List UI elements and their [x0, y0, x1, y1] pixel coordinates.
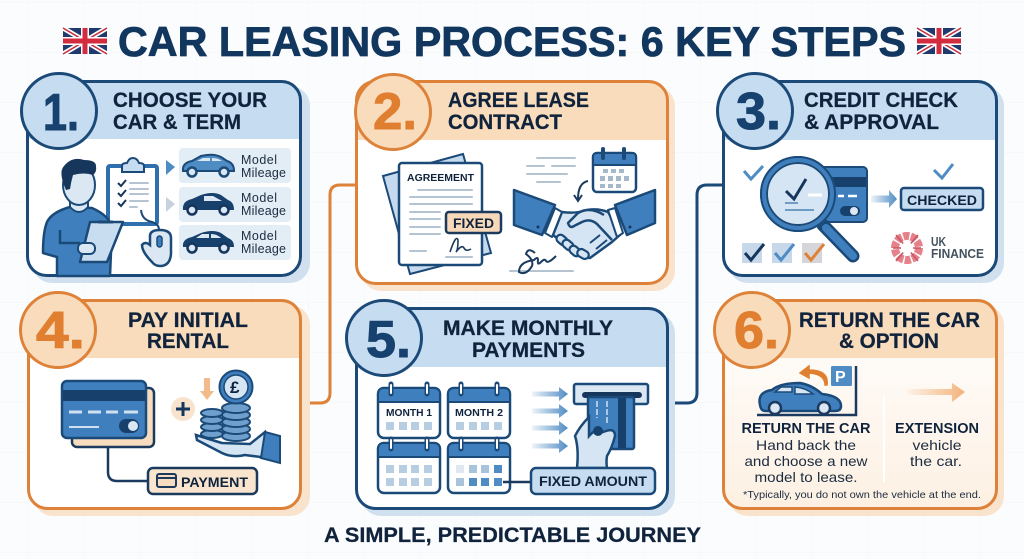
icon: held tablet [78, 222, 123, 262]
icon: agreement document [383, 154, 491, 274]
icon: person [43, 159, 112, 276]
icon: down arrow [200, 378, 214, 400]
number badge 6: 6. [734, 302, 779, 360]
heading [128, 309, 248, 353]
calendar: month 1: MONTH 1 [386, 408, 432, 419]
heading: & APPROVAL [804, 111, 939, 134]
heading: PAYMENTS [472, 339, 585, 362]
text: return the car [742, 421, 871, 485]
heading: MAKE MONTHLY [443, 317, 613, 340]
heading [113, 89, 267, 134]
heading: AGREE LEASE [448, 89, 589, 112]
badge: payment [148, 468, 257, 494]
icon: arrows [166, 160, 175, 212]
heading: CAR & TERM [113, 111, 241, 134]
badge: checked: CHECKED [907, 192, 977, 208]
logo: UK Finance: FINANCE [931, 247, 984, 261]
heading: CONTRACT [448, 111, 562, 134]
heading [804, 89, 958, 134]
badge: fixed: FIXED [453, 215, 494, 231]
panel: step 5 make monthly payments [346, 300, 675, 516]
icon: plus [171, 397, 195, 421]
logo: UK Finance [893, 235, 984, 261]
car option row 1: Model [241, 153, 277, 167]
text: return the car: RETURN THE CAR [742, 421, 871, 437]
car option row 2 [179, 187, 291, 222]
calendar: month 2 [448, 384, 510, 438]
text: return the car: and choose a new [744, 453, 868, 469]
icon: curved arrow [574, 181, 588, 201]
number badge 4 [20, 292, 96, 368]
badge: fixed amount [531, 468, 655, 494]
car option row 3: Model [241, 229, 277, 243]
number badge 1: 1. [43, 84, 79, 142]
icon: coins in hand: £ [230, 378, 240, 397]
text: return the car: model to lease. [754, 469, 858, 485]
calendar: month 1 [378, 384, 440, 438]
icon: return arrow [800, 366, 827, 385]
icon: clipboard [108, 158, 157, 224]
icon: handshake [514, 190, 655, 260]
panel: step 3 credit check and approval [718, 74, 1004, 283]
number badge 2 [356, 74, 430, 150]
heading [443, 317, 613, 362]
icon: checkboxes [742, 243, 824, 263]
heading: PAY INITIAL [128, 309, 248, 332]
heading [448, 89, 589, 134]
car option row 2: Model [241, 191, 277, 205]
badge: payment: PAYMENT [181, 474, 248, 490]
number badge 2: 2. [373, 83, 417, 141]
icon: signature [510, 250, 573, 273]
number badge 5: 5. [366, 311, 411, 369]
heading: & OPTION [839, 330, 939, 353]
text: extension [895, 421, 979, 469]
icon: car [760, 383, 841, 414]
icon: extension arrow [908, 383, 965, 402]
icon: arrow to checked [871, 190, 897, 208]
icon: credit cards [62, 381, 154, 447]
calendar: month 2: MONTH 2 [455, 408, 503, 419]
heading: RENTAL [147, 330, 229, 353]
number badge 3: 3. [736, 83, 781, 141]
text: return the car: Hand back the [756, 437, 856, 453]
car option row 2: Mileage [241, 204, 286, 218]
flag: right Union Jack [917, 28, 961, 54]
car option row 3: Mileage [241, 242, 286, 256]
icon: coins in hand [196, 370, 280, 463]
icon: text lines [527, 158, 575, 182]
icon: card machine and hand [574, 384, 648, 468]
icon: payment arrows [532, 387, 568, 453]
tagline: A SIMPLE, PREDICTABLE JOURNEY [324, 524, 701, 547]
badge: fixed amount: FIXED AMOUNT [539, 473, 647, 489]
heading: CHOOSE YOUR [113, 89, 267, 112]
icon: parking sign and bay: P [835, 369, 846, 386]
number badge 4: 4. [36, 302, 85, 360]
badge: checked [901, 188, 983, 210]
icon: agreement document: AGREEMENT [407, 172, 475, 184]
number badge 1 [22, 74, 96, 148]
heading [799, 309, 980, 353]
divider [883, 395, 885, 482]
calendar: month 3 [378, 439, 440, 493]
car option row 1 [179, 148, 291, 183]
number badge 6 [714, 292, 790, 368]
number badge 5 [346, 300, 422, 376]
panel: step 6 return the car and option [714, 292, 1004, 516]
flag: left Union Jack [63, 28, 107, 54]
panel: step 2 agree lease contract [355, 74, 675, 291]
footnote: *Typically, you do not own the vehicle at the end. [743, 489, 981, 501]
icon: credit card [820, 167, 867, 222]
icon: mouse with hand [141, 210, 171, 266]
icon: check marks [744, 164, 953, 179]
calendar: month 4 [448, 439, 510, 493]
text: extension: the car. [910, 453, 962, 469]
connector: step 4 to step 2 [302, 185, 355, 403]
logo: UK Finance: UK [931, 235, 946, 249]
number badge 3 [718, 74, 792, 148]
heading: CREDIT CHECK [804, 89, 958, 112]
connector: calendar to fixed amount [503, 481, 531, 483]
car option row 1: Mileage [241, 166, 286, 180]
connector: step 5 to step 3 [669, 185, 722, 403]
panel: step 1 choose your car and term [22, 74, 310, 283]
heading: RETURN THE CAR [799, 309, 980, 332]
text: extension: EXTENSION [895, 421, 979, 437]
panel: step 4 pay initial rental [20, 292, 310, 516]
connector: card to payment [108, 447, 148, 481]
icon: parking sign and bay [757, 366, 856, 415]
icon: magnifying glass [761, 157, 853, 256]
car option row 3 [179, 225, 291, 260]
badge: fixed [446, 212, 501, 233]
icon: calendar [593, 149, 636, 192]
text: extension: vehicle [912, 437, 962, 453]
title: CAR LEASING PROCESS: 6 KEY STEPS [118, 18, 906, 65]
